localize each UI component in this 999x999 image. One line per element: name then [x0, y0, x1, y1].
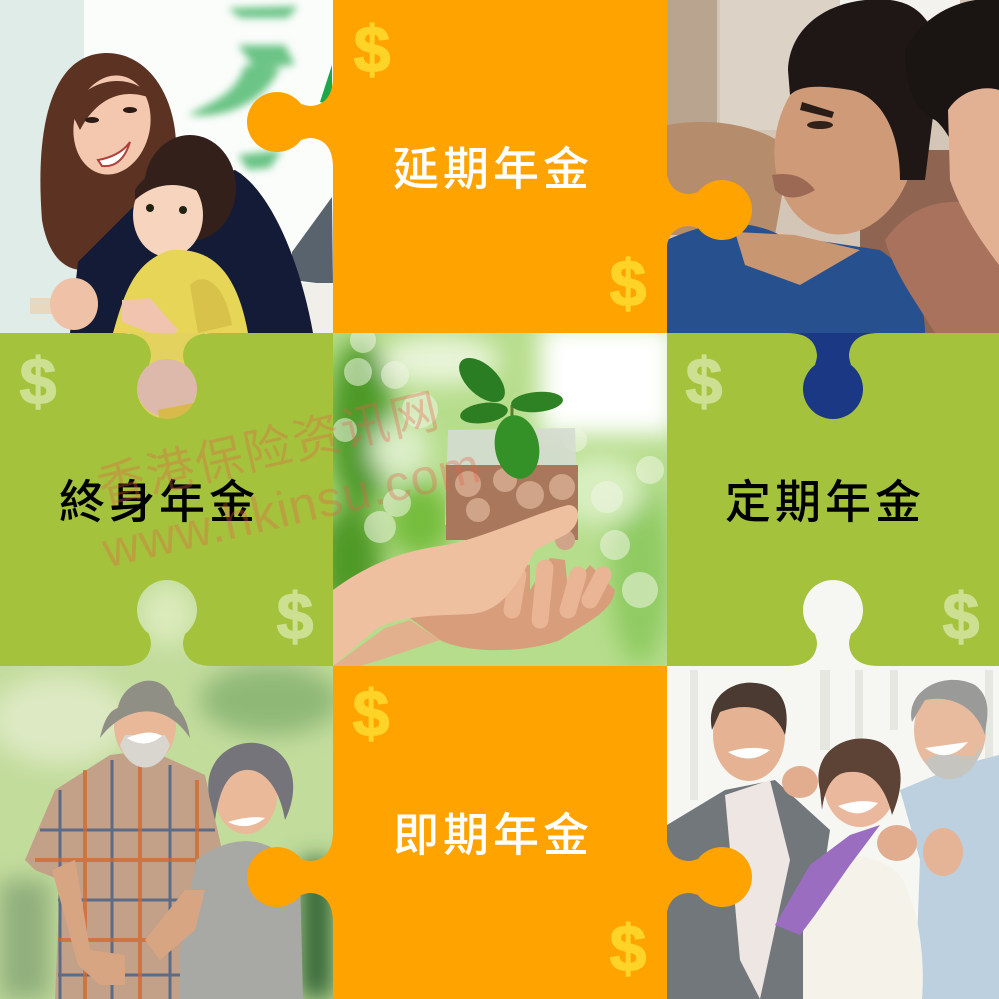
panel: 定期年金 (green): [667, 333, 999, 666]
lower hand: [410, 558, 615, 650]
photo: elderly couple in park: [0, 575, 340, 999]
icon: dollar sign: $: [277, 579, 313, 653]
icon: dollar sign: $: [354, 12, 390, 86]
photo: mother and child: [0, 0, 333, 425]
icon: dollar sign: $: [20, 344, 56, 418]
plant: [510, 405, 514, 416]
icon: dollar sign: $: [610, 911, 646, 985]
panel: 終身年金 (green): [0, 333, 333, 666]
upper hand: [333, 505, 578, 666]
panel: 即期年金 (orange): [247, 666, 752, 999]
jar: [445, 428, 578, 525]
icon: dollar sign: $: [686, 344, 722, 418]
heading: 即期年金: 即期年金: [393, 809, 593, 861]
photo: young couple: [667, 0, 999, 425]
icon: dollar sign: $: [943, 579, 979, 653]
icon: dollar sign: $: [353, 676, 389, 750]
watermark: www.hkinsu.com: [96, 437, 486, 579]
heading: 終身年金: 終身年金: [59, 476, 259, 528]
photo: three seniors: [667, 575, 999, 999]
icon: dollar sign: $: [610, 246, 646, 320]
watermark: [83, 378, 486, 579]
photo: coin jar in hands: [318, 325, 675, 666]
heading: 定期年金: 定期年金: [725, 476, 925, 528]
panel: 延期年金 (orange): [247, 0, 752, 333]
heading: 延期年金: 延期年金: [393, 143, 593, 195]
watermark: 香港保险资讯网: [92, 385, 445, 515]
